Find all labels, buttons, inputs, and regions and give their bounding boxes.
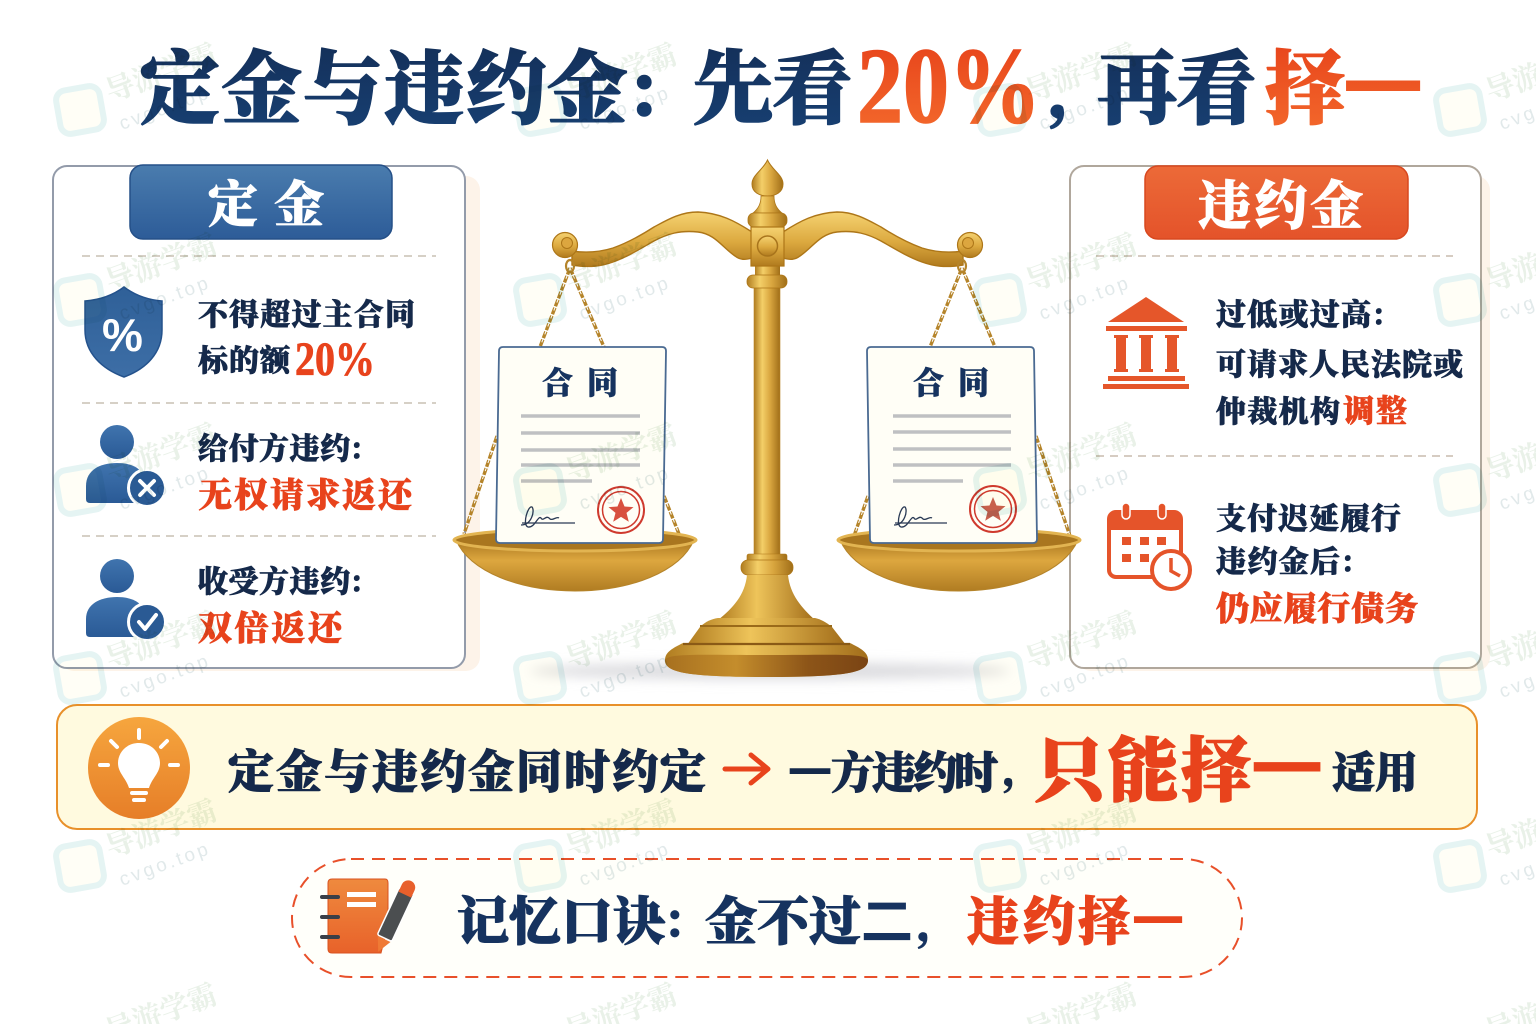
watermark: 导游学霸: [1019, 32, 1142, 110]
text: receiver breach: [198, 557, 362, 650]
watermark: cvgo.top: [577, 272, 674, 325]
panel: 违约金: [1070, 164, 1490, 671]
text: on breach: 方违约时: [831, 737, 998, 801]
title: ,: [1046, 40, 1068, 135]
title: 20%: [857, 27, 1041, 146]
contract: right: [867, 347, 1037, 543]
text: court adjustment: 调整: [1343, 386, 1407, 431]
title: 再看: [1097, 25, 1256, 140]
watermark: 导游学霸: [559, 412, 682, 490]
contract: right: 合同: [913, 358, 989, 403]
text: mnemonic first half: 二: [861, 880, 913, 955]
pan: left: [454, 529, 696, 591]
panel: 定金: [53, 165, 480, 671]
pan: right: [838, 529, 1080, 591]
text: court adjustment: :: [1374, 293, 1384, 333]
text: applies: 适用: [1332, 740, 1418, 801]
watermark: cvgo.top: [577, 838, 674, 891]
text: mnemonic second half: 违约择: [967, 880, 1130, 955]
watermark: 导游学霸: [1019, 600, 1142, 678]
watermark: 导游学霸: [99, 222, 222, 300]
watermark: 导游学霸: [559, 222, 682, 300]
watermark: 导游学霸: [559, 600, 682, 678]
text: 20% cap: 不得超过主合同: [198, 290, 415, 334]
icon: percent shield: %: [102, 309, 143, 361]
callout: only one applies: [57, 705, 1477, 829]
arrow: [725, 755, 768, 783]
title: :: [632, 32, 656, 136]
text: payer breach: [198, 424, 415, 517]
panel heading: 违约金: 违约金: [1198, 164, 1363, 240]
watermark: cvgo.top: [117, 838, 214, 891]
title: 定金与违约金: [140, 25, 627, 140]
watermark: cvgo.top: [1037, 650, 1134, 703]
watermark: cvgo.top: [117, 82, 214, 135]
illustration: balance scale: [454, 160, 1080, 679]
chains: [464, 268, 1070, 536]
text: receiver breach: :: [352, 560, 362, 600]
icon: light bulb: [88, 717, 190, 819]
ground shadow: [530, 663, 1010, 679]
text: still must perform: 违约金后: [1216, 537, 1340, 581]
text: still must perform: :: [1343, 540, 1353, 580]
text: mnemonic first half: [705, 880, 931, 955]
text: on breach: ,: [1001, 738, 1015, 798]
watermark: cvgo.top: [577, 82, 674, 135]
watermark: cvgo.top: [117, 650, 214, 703]
text: 20% cap: [198, 290, 415, 386]
contract: left: [496, 347, 666, 543]
icon: receiver breach: [86, 559, 166, 640]
watermark: cvgo.top: [577, 650, 674, 703]
icon: court: [1103, 297, 1189, 389]
text: agreed together: 定金与违约金同时约定: [228, 736, 706, 802]
watermark: cvgo.top: [1037, 82, 1134, 135]
watermark: 导游学霸: [99, 32, 222, 110]
icon: percent shield: [85, 287, 162, 377]
text: court adjustment: [1216, 290, 1463, 431]
watermark: cvgo.top: [1037, 462, 1134, 515]
watermark: 导游学霸: [559, 788, 682, 866]
text: choose one: 一: [1251, 711, 1323, 816]
column and base: [665, 160, 868, 677]
text: court adjustment: 仲裁机构: [1216, 387, 1340, 431]
watermark: cvgo.top: [577, 462, 674, 515]
title: 先看: [693, 25, 852, 140]
text: court adjustment: 过低或过高: [1216, 290, 1371, 334]
panel heading: 违约金: [1145, 164, 1408, 240]
text: payer breach: 无权请求返还: [198, 468, 415, 517]
text: receiver breach: 收受方违约: [198, 557, 350, 601]
text: on breach: 一: [788, 737, 832, 801]
title: [140, 25, 1423, 146]
contract: left: 合同: [542, 358, 618, 403]
text: mnemonic first half: 金不过: [705, 880, 861, 955]
watermark: cvgo.top: [117, 272, 214, 325]
icon: payer breach: [86, 425, 166, 506]
watermark: 导游学霸: [1019, 788, 1142, 866]
watermark: 导游学霸: [99, 600, 222, 678]
watermark: 导游学霸: [1019, 222, 1142, 300]
beam: [552, 212, 982, 272]
text: 20% cap: 20%: [295, 333, 375, 386]
title: 择: [1265, 25, 1345, 140]
panel heading: 定金: [130, 165, 392, 239]
watermark: 导游学霸: [99, 412, 222, 490]
title: 一: [1343, 25, 1423, 141]
text: 20% cap: 标的额: [198, 336, 292, 380]
text: payer breach: :: [352, 427, 362, 467]
watermark: cvgo.top: [1037, 838, 1134, 891]
text: receiver breach: 双倍返还: [198, 601, 345, 650]
watermark: 导游学霸: [99, 788, 222, 866]
panel heading: 定金: 定金: [208, 165, 324, 237]
text: still must perform: [1216, 494, 1418, 630]
text: mnemonic second half: 一: [1132, 880, 1184, 955]
text: still must perform: 支付迟延履行: [1216, 494, 1401, 538]
watermark: 导游学霸: [1019, 412, 1142, 490]
watermark: cvgo.top: [1037, 272, 1134, 325]
callout: mnemonic: [292, 859, 1242, 977]
text: still must perform: 仍应履行债务: [1216, 583, 1418, 630]
text: court adjustment: 可请求人民法院或: [1216, 340, 1463, 384]
watermark: 导游学霸: [559, 32, 682, 110]
text: choose one: 只能择: [1035, 715, 1251, 816]
text: mnemonic first half: ,: [915, 888, 931, 954]
icon: calendar clock: [1109, 503, 1190, 589]
text: mnemonic label: :: [667, 884, 683, 950]
icon: notebook and pen: [322, 878, 418, 955]
text: payer breach: 给付方违约: [198, 424, 350, 468]
watermark: cvgo.top: [117, 462, 214, 515]
text: mnemonic label: 记忆口诀: [457, 880, 665, 955]
